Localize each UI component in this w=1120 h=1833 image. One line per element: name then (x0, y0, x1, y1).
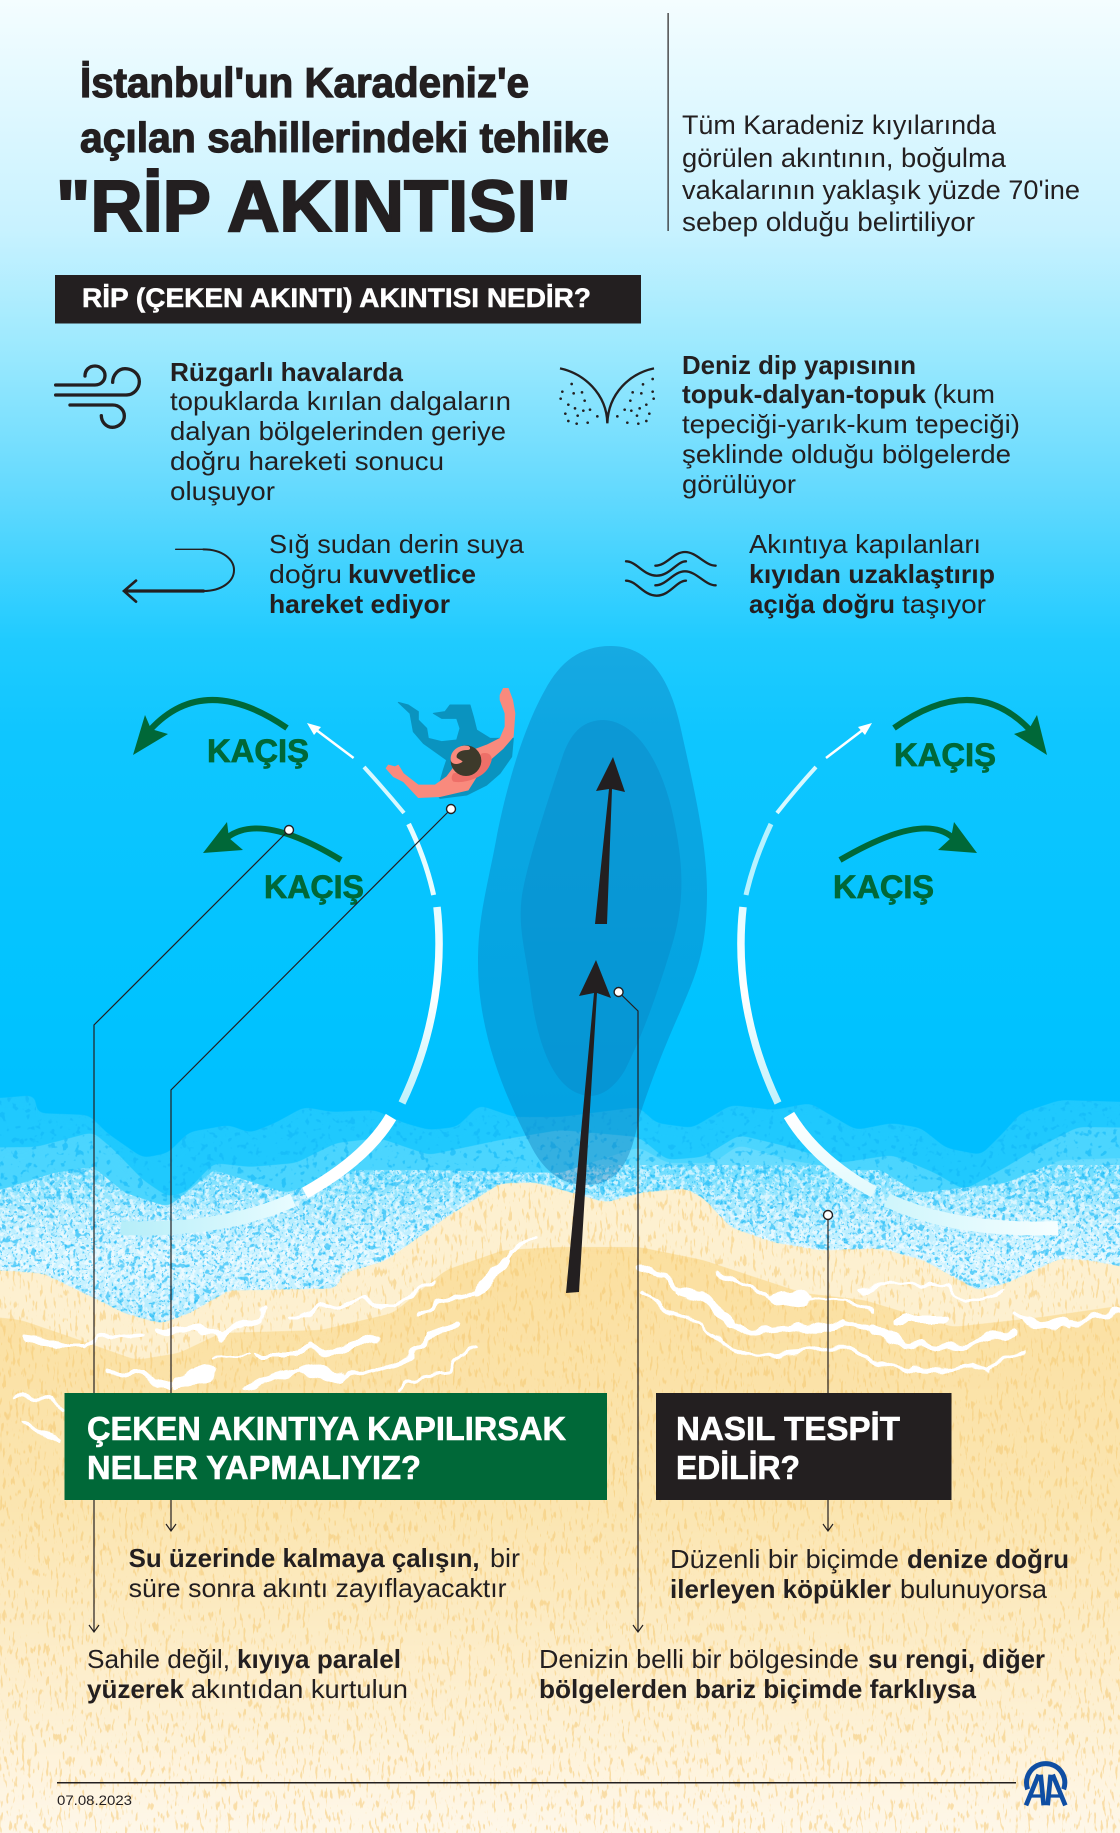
leader: su rengi (619, 992, 643, 1632)
white foam lines on the sand (14, 1235, 1120, 1441)
text: sea bed structure: görülüyor (682, 469, 796, 499)
icon: AA logo (1026, 1764, 1065, 1805)
rip current blob (478, 646, 707, 1185)
text: sea bed structure: Deniz dip yapısının (682, 350, 916, 380)
icon: waves (626, 552, 716, 596)
panel heading: how to detect (656, 1393, 952, 1500)
detection: water colour: bölgelerden bariz biçimde farklıysa (539, 1674, 977, 1704)
intro text: vakalarının yaklaşık yüzde 70'ine (682, 175, 1080, 205)
leader dots (284, 804, 832, 1220)
detection: foam: denize doğru (907, 1544, 1069, 1574)
text: sea bed structure: (kum (933, 379, 995, 409)
text: windy weather: oluşuyor (170, 476, 275, 506)
title (56, 59, 609, 247)
black flow arrow lower (566, 960, 611, 1293)
divider next to intro (668, 13, 669, 231)
heading bar: what is a rip current (55, 275, 641, 324)
leader lines (89, 809, 833, 1632)
swimmer hair highlight (451, 746, 470, 764)
black flow arrow upper (595, 757, 625, 924)
small white arrow left (307, 723, 354, 758)
left circulation path dashes (121, 767, 439, 1228)
title line 2: açılan sahillerindeki tehlike (80, 114, 609, 161)
text: windy weather: dalyan bölgelerinden geriye (170, 416, 506, 446)
intro text: Tüm Karadeniz kıyılarında (682, 110, 997, 140)
panel: sand layers (0, 1180, 1120, 1833)
text: shallow to deep (269, 529, 525, 619)
foam band middle (0, 1127, 1120, 1400)
panel heading: how to detect: EDİLİR? (676, 1449, 800, 1486)
text: windy weather: topuklarda kırılan dalgaların (170, 386, 511, 416)
label: KAÇIŞ lower left: KAÇIŞ (264, 869, 364, 905)
label: KAÇIŞ top right: KAÇIŞ (894, 737, 996, 773)
swimmer shadow (398, 702, 513, 798)
leader: köpükler (823, 1215, 833, 1531)
text: shallow to deep: doğru (269, 559, 342, 589)
footer rule (57, 1782, 1016, 1784)
swimmer shaded skin (452, 753, 492, 782)
pale wet sand (0, 1182, 1120, 1833)
panel heading: what to do: ÇEKEN AKINTIYA KAPILIRSAK (87, 1410, 566, 1447)
advice: swim parallel (87, 1644, 408, 1704)
text: carried offshore: kıyıdan uzaklaştırıp (749, 559, 995, 589)
advice: stay afloat: bir (490, 1543, 520, 1573)
text: shallow to deep: kuvvetlice (348, 559, 476, 589)
text: sea bed structure: şeklinde olduğu bölgelerde (682, 439, 1011, 469)
date: 07.08.2023 (57, 1792, 132, 1808)
text: carried offshore: açığa doğru (749, 589, 895, 619)
foam texture blue large (0, 1095, 1120, 1335)
icon: sea bed (559, 368, 655, 425)
icon: return arrow (124, 549, 234, 602)
label: KAÇIŞ top left: KAÇIŞ (207, 733, 309, 769)
text: carried offshore (749, 529, 995, 619)
advice: stay afloat: süre sonra akıntı zayıflayacaktır (129, 1573, 507, 1603)
panel heading: what to do (64, 1393, 607, 1500)
outer blob (478, 646, 707, 1185)
foam texture blue small (0, 1165, 1120, 1335)
swimmer head (451, 745, 481, 776)
title line 3: "RİP AKINTISI" (56, 167, 571, 247)
escape arrow lower left (203, 822, 341, 860)
dry sand (0, 1247, 1120, 1833)
foam texture white (0, 1165, 1120, 1335)
detection: foam: bulunuyorsa (900, 1574, 1048, 1604)
text: windy weather: Rüzgarlı havalarda (170, 357, 404, 387)
advice: stay afloat: Su üzerinde kalmaya çalışın, (129, 1543, 480, 1573)
text: sea bed structure: topuk-dalyan-topuk (682, 379, 927, 409)
panel heading: what to do: NELER YAPMALIYIZ? (87, 1449, 421, 1486)
label: KAÇIŞ lower right: KAÇIŞ (833, 869, 934, 905)
detection: water colour (539, 1644, 1045, 1704)
advice: swim parallel: Sahile değil, (87, 1644, 230, 1674)
heading bar: what is a rip current: RİP (ÇEKEN AKINTI) AKINTISI NEDİR? (82, 283, 591, 313)
text: sea bed structure (682, 350, 1020, 499)
inner blob (521, 720, 681, 1096)
text: carried offshore: Akıntıya kapılanları (749, 529, 981, 559)
advice: swim parallel: akıntıdan kurtulun (191, 1674, 408, 1704)
leader: su üzerinde (166, 809, 451, 1531)
intro text: görülen akıntının, boğulma (682, 143, 1007, 173)
detection: foam: Düzenli bir biçimde (670, 1544, 899, 1574)
title line 1: İstanbul'un Karadeniz'e (80, 59, 529, 106)
escape labels (207, 733, 996, 905)
panel: foam and sand shoreline (0, 1096, 1120, 1322)
detection: foam: ilerleyen köpükler (670, 1574, 891, 1604)
icon: wind (56, 366, 139, 427)
sand texture (0, 1180, 1120, 1833)
text: shallow to deep: Sığ sudan derin suya (269, 529, 525, 559)
right circulation path dashes (741, 767, 1058, 1228)
intro text (682, 110, 1080, 237)
detection: water colour: Denizin belli bir bölgesinde (539, 1644, 859, 1674)
detection: water colour: su rengi, diğer (868, 1644, 1045, 1674)
text: windy weather (170, 357, 511, 506)
escape arrow top left (133, 700, 287, 755)
advice: stay afloat (129, 1543, 520, 1603)
swimmer illustration (386, 688, 515, 798)
text: windy weather: doğru hareketi sonucu (170, 446, 444, 476)
small white arrow right (826, 723, 872, 758)
leader: kıyıya paralel (89, 830, 289, 1632)
escape arrow lower right (840, 822, 977, 860)
foam band outer (0, 1095, 1120, 1400)
text: carried offshore: taşıyor (902, 589, 986, 619)
escape arrow top right (894, 700, 1047, 755)
detection: foam (670, 1544, 1069, 1604)
text: shallow to deep: hareket ediyor (269, 589, 450, 619)
swimmer body (386, 688, 515, 798)
advice: swim parallel: kıyıya paralel (237, 1644, 401, 1674)
panel heading: how to detect: NASIL TESPİT (676, 1410, 900, 1447)
intro text: sebep olduğu belirtiliyor (682, 207, 975, 237)
foam band inner (0, 1145, 1120, 1400)
text: sea bed structure: tepeciği-yarık-kum tepeciği) (682, 409, 1020, 439)
advice: swim parallel: yüzerek (87, 1674, 185, 1704)
